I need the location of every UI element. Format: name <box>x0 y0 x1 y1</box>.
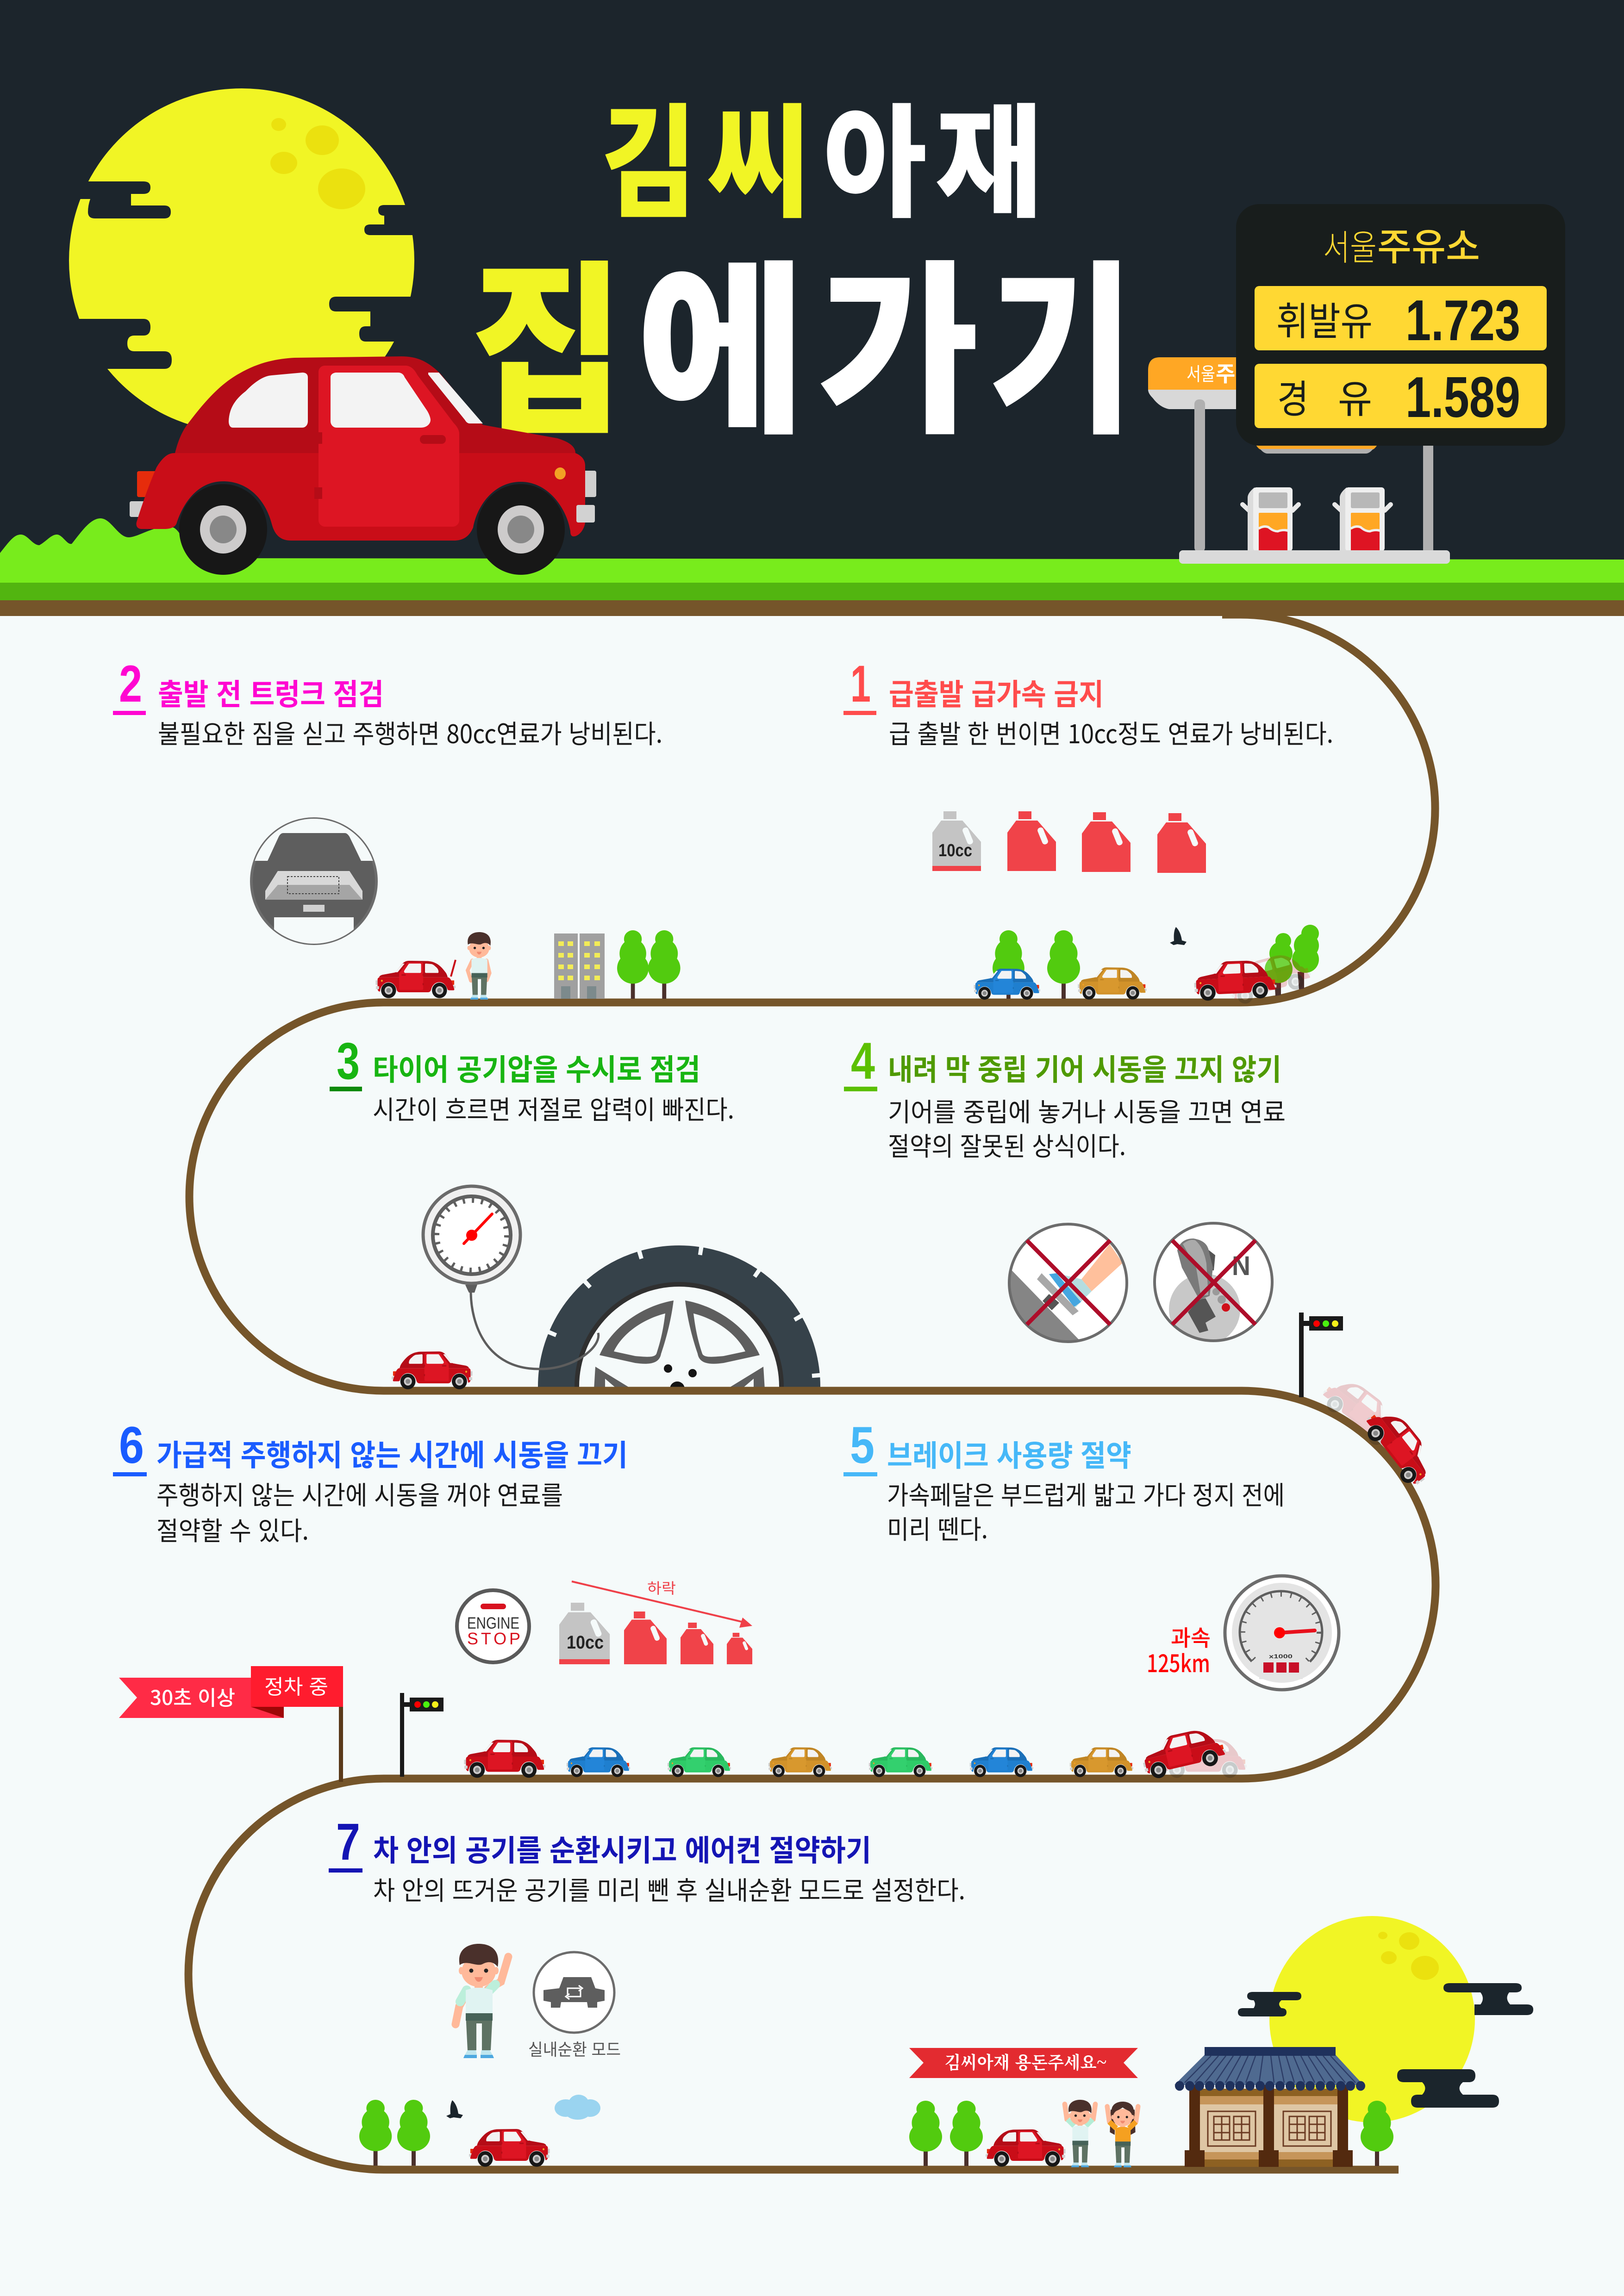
recirculation mode caption: 실내순환 모드 <box>528 2036 621 2060</box>
step 3 heading: 3 <box>337 1032 360 1090</box>
step 3 heading <box>330 1032 700 1091</box>
flag: 30 seconds idling: 정차 중 <box>264 1670 328 1700</box>
price sign board: 주유소 <box>1377 216 1480 271</box>
title: 집에가기 <box>470 202 1134 471</box>
price sign board: 유 <box>1338 368 1372 424</box>
bottles shrinking with arrow <box>559 1577 752 1664</box>
step 3 body text: 시간이 흐르면 저절로 압력이 빠진다. <box>373 1089 734 1127</box>
cars braking on slope <box>1317 1370 1441 1491</box>
scene: trunk check <box>376 930 681 1000</box>
price sign board: 서울 <box>1323 219 1377 270</box>
scene: road trees, bird, cloud and car <box>359 2095 600 2167</box>
title: 집에가기: 가 <box>818 202 979 471</box>
step 3 heading: 타이어 공기압을 수시로 점검 <box>373 1046 700 1089</box>
title: 집에가기: 집 <box>470 202 625 471</box>
icon: engine stop button <box>457 1590 529 1662</box>
icon: open trunk <box>250 817 378 945</box>
scene: arrival with trees, car and children <box>909 2100 1138 2167</box>
fuel pump 1 <box>1243 487 1299 551</box>
step 2 heading: 2 <box>119 655 142 713</box>
price sign board: 휘발유 <box>1276 291 1373 347</box>
title: 집에가기: 기 <box>988 202 1134 471</box>
gas station canopy and poles: 주 <box>1216 357 1235 388</box>
step 1 heading: 1 <box>850 655 871 713</box>
step 6 body text: 절약할 수 있다. <box>156 1511 309 1548</box>
step 1 heading: 급출발 급가속 금지 <box>889 671 1104 714</box>
step 4 heading: 내려 막 중립 기어 시동을 끄지 않기 <box>888 1046 1281 1089</box>
small red car on step 3 <box>392 1351 473 1389</box>
step 6 body text: 주행하지 않는 시간에 시동을 꺼야 연료를 <box>156 1475 563 1512</box>
clouds at destination <box>1238 1983 1533 2108</box>
moon with clouds <box>65 88 417 433</box>
step 6 heading: 6 <box>119 1416 144 1474</box>
step 5 body text: 가속페달은 부드럽게 밟고 가다 정지 전에 <box>887 1475 1285 1512</box>
banner: 김씨아재 용돈주세요 <box>909 2048 1138 2078</box>
step 6 body text <box>156 1475 563 1548</box>
price sign board: 1.723 <box>1405 289 1520 353</box>
step 6 heading <box>113 1416 628 1476</box>
speeding callout text: 과속 <box>1171 1620 1211 1652</box>
flag: 30 seconds idling <box>119 1666 343 1782</box>
step 4 body text <box>888 1092 1286 1164</box>
icon: engine stop button: ENGINE <box>467 1614 519 1632</box>
hero red car <box>130 356 596 575</box>
step 4 body text: 절약의 잘못된 상식이다. <box>888 1126 1126 1164</box>
title: 김씨아재: 아 <box>823 65 927 242</box>
moon at destination <box>1269 1916 1475 2122</box>
traffic light lower <box>400 1693 443 1777</box>
step 2 body text: 불필요한 짐을 싣고 주행하면 80cc연료가 낭비된다. <box>158 714 662 751</box>
icon: hand on gear crossed out <box>1005 1224 1127 1347</box>
gas station canopy and poles <box>1148 357 1433 552</box>
icon: neutral gear crossed out: N <box>1232 1251 1250 1281</box>
flag: 30 seconds idling: 30초 이상 <box>150 1681 235 1711</box>
bottles: 10cc row: 10cc <box>938 841 972 860</box>
icon: engine stop button: STOP <box>467 1629 520 1648</box>
step 6 heading: 가급적 주행하지 않는 시간에 시동을 끄기 <box>156 1432 628 1475</box>
scene: hard acceleration <box>974 925 1319 1007</box>
step 7 heading: 7 <box>336 1813 360 1871</box>
speeding callout text: 125km <box>1147 1644 1210 1679</box>
header night sky panel <box>0 0 1624 602</box>
icon: speedometer: x1000 <box>1269 1653 1293 1660</box>
step 4 body text: 기어를 중립에 놓거나 시동을 끄면 연료 <box>888 1092 1286 1129</box>
step 2 heading <box>113 655 384 715</box>
bottles: 10cc row <box>932 811 1206 873</box>
road path <box>188 615 1436 2170</box>
step 5 heading: 5 <box>850 1416 874 1474</box>
speeding callout text <box>1147 1620 1211 1679</box>
fuel pump 2 <box>1335 487 1391 551</box>
step 2 heading: 출발 전 트렁크 점검 <box>158 671 384 714</box>
step 1 heading <box>843 655 1104 715</box>
title: 김씨아재: 김 <box>601 65 696 242</box>
step 5 body text <box>887 1475 1285 1547</box>
tire gauge and wheel <box>421 1185 820 1387</box>
step 7 body text: 차 안의 뜨거운 공기를 미리 뺀 후 실내순환 모드로 설정한다. <box>373 1870 965 1908</box>
icon: speedometer <box>1223 1574 1339 1691</box>
price sign board <box>1236 204 1565 446</box>
hanok house <box>1174 2047 1365 2167</box>
step 4 heading: 4 <box>851 1032 875 1090</box>
gas station canopy and poles: 서울 <box>1187 359 1215 386</box>
bottles shrinking with arrow: 하락 <box>647 1577 676 1598</box>
title: 김씨아재: 재 <box>935 65 1043 242</box>
step 4 heading <box>844 1032 1281 1091</box>
title: 집에가기: 에 <box>636 202 806 471</box>
row of stopped cars <box>464 1724 1247 1781</box>
step 5 body text: 미리 뗀다. <box>887 1509 988 1547</box>
icon: recirculation mode <box>534 1952 614 2033</box>
waving man <box>456 1944 508 2058</box>
step 7 heading: 차 안의 공기를 순환시키고 에어컨 절약하기 <box>373 1827 871 1870</box>
tree beside house <box>1361 2101 1393 2166</box>
price sign board: 경 <box>1277 368 1309 424</box>
step 7 heading <box>329 1813 871 1873</box>
traffic light upper <box>1299 1313 1343 1397</box>
gas station base <box>1179 550 1450 564</box>
title: 김씨아재: 씨 <box>707 65 810 242</box>
title: 김씨아재 <box>601 65 1043 242</box>
step 5 heading <box>843 1416 1131 1476</box>
step 5 heading: 브레이크 사용량 절약 <box>887 1432 1131 1475</box>
bottles shrinking with arrow: 10cc <box>567 1632 604 1653</box>
grass and ground bands <box>0 518 1624 616</box>
icon: neutral gear crossed out <box>1155 1223 1272 1345</box>
banner: 김씨아재 용돈주세요: 김씨아재 용돈주세요~ <box>944 2048 1107 2074</box>
price sign board: 1.589 <box>1405 366 1520 429</box>
step 1 body text: 급 출발 한 번이면 10cc정도 연료가 낭비된다. <box>889 714 1333 751</box>
